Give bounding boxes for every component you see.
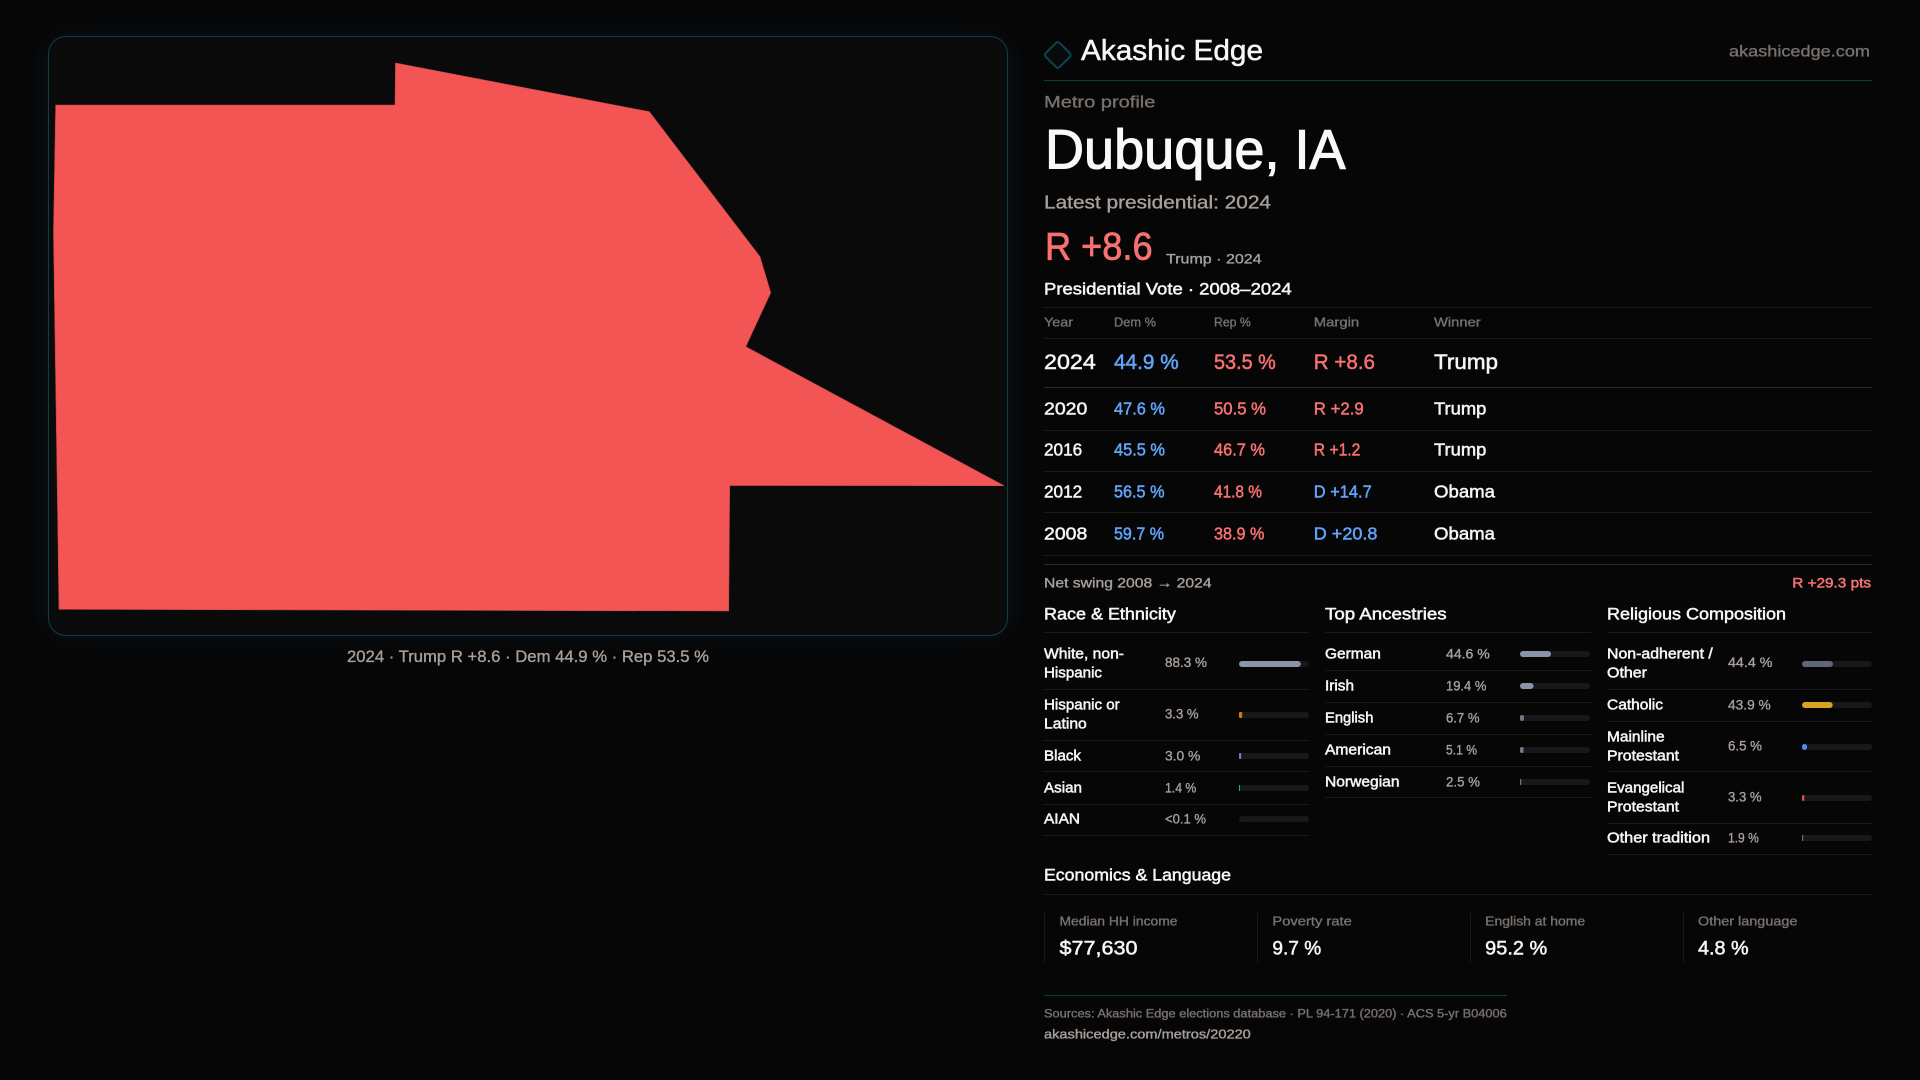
row: irish: Irish	[1325, 678, 1354, 694]
row: other tradition	[1607, 829, 1872, 846]
stat: english at home	[1470, 913, 1585, 962]
row 2016	[1044, 440, 1486, 460]
row: american	[1325, 741, 1590, 758]
row: asian: 1.4 %	[1165, 780, 1196, 796]
row: english	[1325, 709, 1590, 726]
map panel	[48, 36, 1008, 636]
row: asian: Asian	[1044, 781, 1082, 797]
row 2012: D +14.7	[1314, 481, 1372, 501]
stat: other language: Other language	[1698, 914, 1797, 928]
table header row: Dem %	[1114, 315, 1156, 330]
heading: Race & Ethnicity	[1044, 605, 1177, 623]
map caption: 2024 · Trump R +8.6 · Dem 44.9 % · Rep 53.5 %	[347, 647, 709, 666]
header: brand	[1044, 35, 1870, 69]
row 2008: 2008	[1044, 524, 1087, 544]
row: catholic: Catholic	[1607, 697, 1663, 713]
row 2024	[1044, 351, 1498, 374]
row 2008: Obama	[1434, 524, 1495, 544]
row: non-adherent: 44.4 %	[1728, 654, 1772, 670]
stat: english at home: English at home	[1485, 914, 1585, 928]
stat: poverty rate: 9.7 %	[1272, 939, 1321, 960]
net swing row: R +29.3 pts	[1792, 574, 1871, 590]
row 2020: 50.5 %	[1214, 398, 1266, 418]
row: english: English	[1325, 710, 1373, 726]
metro title: Dubuque, IA	[1045, 117, 1346, 180]
row: aian	[1044, 810, 1309, 827]
row: catholic	[1607, 696, 1872, 713]
stat: other language: 4.8 %	[1698, 939, 1749, 960]
row: norwegian: Norwegian	[1325, 774, 1400, 790]
row: mainline: Protestant	[1607, 748, 1679, 764]
row: other tradition: 1.9 %	[1728, 829, 1759, 845]
row: hispanic: Hispanic or	[1044, 697, 1120, 713]
row: asian	[1044, 780, 1309, 797]
row: hispanic: 3.3 %	[1165, 705, 1199, 721]
row 2024: 2024	[1044, 351, 1096, 374]
table heading: Presidential Vote · 2008–2024	[1044, 280, 1292, 298]
headline margin: R +8.6	[1045, 225, 1153, 268]
heading: Religious Composition	[1607, 605, 1786, 623]
row: black	[1044, 748, 1309, 765]
row: mainline: Mainline	[1607, 729, 1665, 745]
title block	[1044, 92, 1346, 268]
row 2012: 41.8 %	[1214, 481, 1262, 501]
latest presidential label: Latest presidential: 2024	[1044, 191, 1271, 212]
row 2008	[1044, 524, 1495, 544]
row 2016: 46.7 %	[1214, 440, 1265, 460]
row: english: 6.7 %	[1446, 709, 1480, 725]
stat: median income	[1044, 913, 1178, 962]
row: evangelical: Protestant	[1607, 800, 1679, 816]
net swing row: Net swing 2008 → 2024	[1044, 574, 1212, 590]
stat: median income: $77,630	[1060, 939, 1138, 960]
row: white: Hispanic	[1044, 665, 1102, 681]
row: hispanic	[1044, 697, 1309, 732]
heading: Top Ancestries	[1325, 605, 1447, 623]
row: evangelical	[1607, 781, 1872, 816]
row: white	[1044, 646, 1309, 681]
row 2012: 56.5 %	[1114, 481, 1164, 501]
row 2008: 38.9 %	[1214, 524, 1264, 544]
panel: religious composition	[1607, 605, 1872, 854]
stat: poverty rate	[1258, 913, 1352, 962]
row 2020: Trump	[1434, 398, 1486, 418]
eyebrow: Metro profile	[1044, 92, 1155, 111]
footer sources: akashicedge.com/metros/20220	[1044, 1027, 1251, 1041]
row: non-adherent: Other	[1607, 665, 1647, 681]
row: non-adherent	[1607, 646, 1872, 681]
row: aian: AIAN	[1044, 811, 1080, 827]
table header row: Rep %	[1214, 315, 1251, 330]
presidential vote table	[1044, 280, 1872, 556]
row: irish: 19.4 %	[1446, 677, 1486, 693]
stat: english at home: 95.2 %	[1485, 939, 1547, 960]
brand url: akashicedge.com	[1729, 44, 1870, 61]
row 2020: R +2.9	[1314, 398, 1364, 418]
row: irish	[1325, 677, 1590, 694]
footer sources: Sources: Akashic Edge elections database · PL 94-171 (2020) · ACS 5-yr B04006	[1044, 1008, 1507, 1020]
row: black: 3.0 %	[1165, 748, 1200, 764]
icon: diamond logo	[1044, 41, 1072, 69]
row: evangelical: Evangelical	[1607, 781, 1684, 797]
row 2024: 44.9 %	[1114, 351, 1179, 374]
row: white: White, non-	[1044, 646, 1124, 662]
row: norwegian: 2.5 %	[1446, 773, 1480, 789]
row: german	[1325, 645, 1590, 662]
footer sources	[1044, 1008, 1507, 1041]
row 2016: 45.5 %	[1114, 440, 1165, 460]
row 2008: 59.7 %	[1114, 524, 1164, 544]
row 2024: Trump	[1434, 351, 1498, 374]
row: german: German	[1325, 646, 1381, 662]
row: american: American	[1325, 742, 1391, 758]
row 2020: 47.6 %	[1114, 398, 1165, 418]
row 2016: 2016	[1044, 440, 1082, 460]
headline winner: Trump · 2024	[1166, 250, 1262, 266]
row: hispanic: Latino	[1044, 716, 1087, 732]
panel: economics and language	[1044, 867, 1872, 962]
table header row: Year	[1044, 315, 1074, 330]
panel: race and ethnicity	[1044, 605, 1309, 836]
brand name: Akashic Edge	[1081, 35, 1263, 67]
row: norwegian	[1325, 773, 1590, 790]
row 2020: 2020	[1044, 398, 1088, 418]
row: non-adherent: Non-adherent /	[1607, 646, 1714, 662]
stat: median income: Median HH income	[1060, 914, 1178, 928]
heading: Economics & Language	[1044, 867, 1231, 885]
row 2016: R +1.2	[1314, 440, 1360, 460]
row: catholic: 43.9 %	[1728, 696, 1771, 712]
metro map shape	[54, 63, 1004, 611]
stat: other language	[1684, 913, 1797, 962]
row 2020	[1044, 398, 1486, 418]
row 2024: R +8.6	[1314, 351, 1375, 374]
row 2012: 2012	[1044, 481, 1082, 501]
panel: top ancestries	[1325, 605, 1591, 798]
row: white: 88.3 %	[1165, 654, 1207, 670]
row: evangelical: 3.3 %	[1728, 789, 1762, 805]
row 2008: D +20.8	[1314, 524, 1377, 544]
row: american: 5.1 %	[1446, 741, 1477, 757]
row: german: 44.6 %	[1446, 645, 1490, 661]
table header row: Margin	[1314, 315, 1359, 330]
table header row	[1044, 315, 1481, 330]
row: mainline: 6.5 %	[1728, 737, 1762, 753]
net swing row	[1044, 574, 1871, 590]
row: mainline	[1607, 729, 1872, 764]
row 2016: Trump	[1434, 440, 1486, 460]
row 2012	[1044, 481, 1495, 501]
row: other tradition: Other tradition	[1607, 830, 1710, 846]
row: black: Black	[1044, 749, 1082, 765]
row 2024: 53.5 %	[1214, 351, 1276, 374]
table header row: Winner	[1434, 315, 1481, 330]
row: aian: <0.1 %	[1165, 810, 1206, 826]
stat: poverty rate: Poverty rate	[1272, 914, 1352, 928]
row 2012: Obama	[1434, 481, 1495, 501]
